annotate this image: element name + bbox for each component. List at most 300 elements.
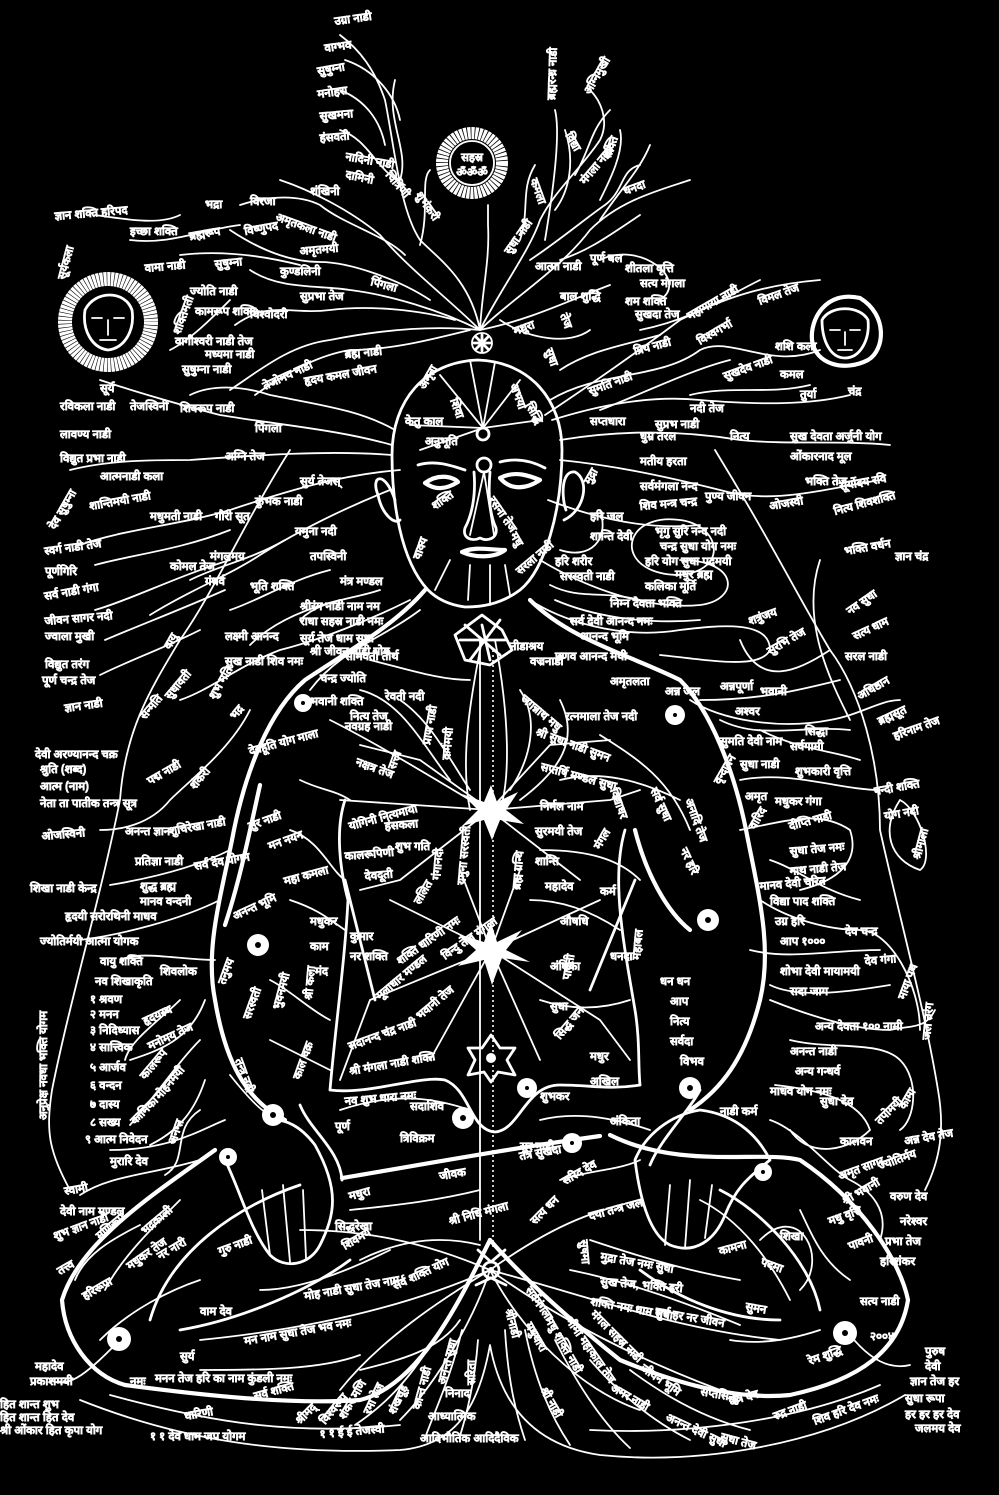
- labels: right side column: सुधा देव: [819, 1094, 854, 1109]
- labels: torso and arms: नव शुभ धारा नमः: [343, 1090, 417, 1109]
- labels: left side column: अग्नि तेज: [225, 449, 265, 463]
- body outline: seated figure: [49, 450, 941, 1458]
- labels: left side column: अनुप्रेक्ष नवधा भक्ति योगम: [36, 1010, 51, 1120]
- labels: right side column: दीप्ति नाडी: [786, 808, 834, 833]
- labels: right side column: देव चन्द्र: [844, 924, 879, 938]
- labels: right side column: सरस्वती नाडी: [559, 569, 616, 583]
- labels: left side column: हरिरूपा: [79, 1274, 115, 1303]
- labels: legs and lower radial fan: विश्वरूप: [316, 1390, 351, 1428]
- labels: right side column: ज्ञान तेज हर: [909, 1374, 960, 1388]
- labels: right side column: चन्द्र सुधा योग नमः: [659, 539, 737, 554]
- labels: right side column: सूर्योदय रवि: [837, 471, 888, 494]
- labels: legs and lower radial fan: सर्व शक्ति: [251, 1379, 296, 1403]
- labels: legs and lower radial fan: १ १ देव धाम जप योगम: [150, 1429, 247, 1443]
- labels: torso and arms: ललित: [410, 877, 435, 907]
- labels: upper tree of channels: शुभंकरी: [412, 189, 443, 225]
- labels: upper tree of channels: इच्छा शक्ति: [129, 224, 178, 238]
- labels: upper tree of channels: विश्वोदरी: [249, 307, 288, 321]
- labels: upper tree of channels: शक्तिमती: [170, 293, 197, 336]
- labels: torso and arms: सरला नाडी: [512, 537, 557, 578]
- labels: right side column: ब्रह्मसूत: [875, 704, 909, 729]
- labels: upper tree of channels: मंगला नाडी: [576, 142, 617, 188]
- labels: left side column: नव शिखाकृति: [94, 974, 153, 989]
- labels: upper tree of channels: उग्रा नाडी: [332, 9, 374, 28]
- labels: legs and lower radial fan: मंगल सहस्र नाडी: [587, 1307, 646, 1366]
- labels: right side column: वरुण देव: [889, 1189, 928, 1203]
- labels: legs and lower radial fan: सत्य धन: [528, 1194, 562, 1228]
- labels: torso and arms: अभया: [507, 382, 528, 412]
- labels: left side column: शिवलोक: [159, 964, 198, 978]
- labels: right side column: मानव देवी चरित: [758, 873, 826, 893]
- labels: legs and lower radial fan: मनन तेज हरि का नाम कुंडली नमः: [154, 1371, 293, 1386]
- labels: upper tree of channels: वागीश्वरी नाडी तेज: [174, 334, 253, 348]
- labels: upper tree of channels: वामा नाडी: [143, 257, 187, 275]
- labels: legs and lower radial fan: शंकर मणि: [335, 1377, 369, 1422]
- labels: torso and arms: सर्व देव योगम: [192, 849, 252, 873]
- labels: legs and lower radial fan: कर्म: [599, 884, 617, 898]
- labels: right side column: मधुकर गंगा: [774, 795, 823, 809]
- labels: torso and arms: सिद्धि: [522, 399, 546, 427]
- labels: legs and lower radial fan: छत्र देव: [726, 1386, 760, 1408]
- labels: right side column: शोभा देवी मायामयी: [780, 964, 861, 978]
- labels: right side column: कामा: [897, 1086, 919, 1112]
- labels: upper tree of channels: चित्रिणी: [382, 167, 414, 201]
- labels: right side column: धुम्र तरल: [640, 431, 677, 444]
- labels: upper tree of channels: अग्निमुखी: [580, 53, 614, 97]
- labels: legs and lower radial fan: औषधि: [560, 914, 589, 928]
- labels: right side column: हरि योग सुधा पदमयी: [644, 554, 733, 569]
- labels: left side column: अनन्त: [167, 1118, 187, 1146]
- labels: right side column: शुभकारी वृत्ति: [795, 764, 852, 779]
- labels: right side column: कालवन: [839, 1136, 873, 1148]
- labels: legs and lower radial fan: सप्तसिन्धु: [698, 1384, 741, 1406]
- labels: left side column: ७ दास्य: [90, 1099, 121, 1111]
- labels: legs and lower radial fan: मन नाम सुधा तेज भव नमः: [242, 1315, 353, 1349]
- labels: right side column: मधु वृत्ति: [825, 1203, 865, 1229]
- labels: torso and arms: शिवा: [447, 395, 468, 421]
- labels: left side column: ४ सात्त्विक: [90, 1040, 134, 1054]
- labels: right side column: अनन्त नाडी: [790, 1044, 838, 1058]
- labels: torso and arms: शक्ति धारिणी नमः: [394, 913, 463, 967]
- labels: upper tree of channels: सुखदा तेज: [634, 307, 680, 322]
- labels: upper tree of channels: हृदय कमल जीवन: [302, 361, 378, 388]
- labels: right side column: ज्ञान चंद्र: [894, 550, 929, 563]
- labels: left side column: २ मनन: [90, 1009, 119, 1021]
- labels: left side column: मोहनमयी: [151, 1062, 188, 1103]
- labels: upper tree of channels: कमला: [527, 176, 548, 207]
- labels: torso and arms: कुमार: [349, 931, 375, 944]
- labels: torso and arms: मानव वन्दनी: [139, 894, 192, 908]
- labels: legs and lower radial fan: अनन्त सुधा: [436, 1337, 461, 1386]
- labels: right side column: सुधा नाडी: [739, 757, 781, 772]
- labels: upper tree of channels: पिंगला: [368, 274, 400, 295]
- labels: torso and arms: कुंभक नाडी: [254, 494, 303, 509]
- labels: legs and lower radial fan: सुधा तेज: [718, 1429, 758, 1453]
- labels: torso and arms: देवदूती: [363, 867, 394, 884]
- labels: legs and lower radial fan: शंखचूड़: [386, 1382, 412, 1417]
- labels: right side column: आप १०००: [780, 936, 825, 948]
- labels: torso and arms: केतु काल: [404, 414, 444, 429]
- labels: left side column: ६ वन्दन: [90, 1080, 122, 1092]
- labels: right side column: मधुर ब्रह्म: [674, 569, 713, 582]
- labels: upper tree of channels: धनदा: [622, 178, 648, 198]
- labels: right side column: अन्न देव तेज: [903, 1126, 955, 1148]
- labels: legs and lower radial fan: धारिणी: [183, 1404, 215, 1423]
- labels: upper tree of channels: तुर्या: [799, 387, 817, 402]
- labels: right side column: जल तरंग: [920, 1001, 936, 1041]
- labels: left side column: कामिका: [127, 1093, 162, 1128]
- labels: right side column: वारिद: [745, 804, 770, 832]
- labels: upper tree of channels: सुषुम्ना: [315, 61, 347, 79]
- labels: legs and lower radial fan: अनादि तेज: [682, 796, 711, 844]
- labels: upper tree of channels: आत्मा नाडी: [535, 259, 583, 273]
- labels: torso and arms: देवहूति योग माला: [246, 726, 321, 760]
- labels: legs and lower radial fan: शक्ति नमः धाम सुधा: [589, 1294, 675, 1324]
- labels: right side column: माधव योग नमः: [769, 1084, 832, 1098]
- labels: legs and lower radial fan: शिखा: [779, 1229, 804, 1243]
- labels: torso and arms: हंसकला: [383, 817, 420, 833]
- labels: right side column: देवी: [924, 1359, 942, 1373]
- labels: torso and arms: त्रिविक्रम: [399, 1131, 436, 1145]
- ear left: [376, 479, 400, 521]
- labels: right side column: सरल नाडी: [844, 649, 888, 663]
- labels: upper tree of channels: कुण्डलिनी: [279, 264, 322, 279]
- labels: legs and lower radial fan: मधुरा: [347, 1185, 373, 1204]
- labels: right side column: मुद्रा: [582, 466, 602, 488]
- labels: torso and arms: तपस्विनी: [309, 549, 347, 563]
- labels: torso and arms: वायु: [162, 630, 182, 653]
- labels: left side column: ८ सख्य: [90, 1117, 122, 1129]
- labels: legs and lower radial fan: सर्वदा: [669, 1034, 694, 1048]
- circle: top lotus: सहस्र: [460, 152, 484, 164]
- labels: torso and arms: प्रतिज्ञा नाडी: [134, 854, 184, 868]
- labels: legs and lower radial fan: दया तन्त्र जल: [587, 1197, 645, 1223]
- labels: left side column: तत्त्व: [55, 1258, 77, 1278]
- labels: torso and arms: रसना तेज: [485, 493, 520, 535]
- labels: right side column: २००४: [870, 1331, 894, 1343]
- labels: left side column: ज्योतिर्मयी आत्मा योगक: [39, 934, 140, 948]
- labels: right side column: मतीय हरता: [639, 454, 688, 468]
- labels: legs and lower radial fan: सुख तेज, भक्ति हरी: [599, 1274, 684, 1296]
- labels: legs and lower radial fan: श्रीनाडी: [502, 1306, 524, 1340]
- labels: upper tree of channels: सुमति नाडी: [585, 369, 635, 399]
- labels: legs and lower radial fan: धनदा: [610, 951, 634, 963]
- labels: upper tree of channels: अमृतकला नाडी: [274, 210, 339, 246]
- labels: legs and lower radial fan: अखिल: [590, 1074, 620, 1088]
- labels: torso and arms: अनन्त भूमि: [230, 890, 280, 924]
- labels: legs and lower radial fan: अंबिका: [550, 959, 581, 973]
- labels: torso and arms: शुभ मति: [205, 663, 236, 702]
- labels: left side column: हृदयी सरोरथिनी माधव: [64, 909, 157, 923]
- labels: legs and lower radial fan: सर्व हर नर जीवन: [653, 1304, 726, 1330]
- labels: legs and lower radial fan: सिद्ध जन: [551, 1003, 587, 1043]
- labels: legs and lower radial fan: महादेव: [544, 879, 574, 893]
- labels: right side column: अमृतलता: [610, 676, 651, 689]
- labels: upper tree of channels: विमल तेज: [755, 280, 801, 308]
- labels: torso and arms: सदाशिव: [409, 1099, 445, 1113]
- labels: legs and lower radial fan: महाबल: [631, 928, 646, 961]
- labels: legs and lower radial fan: रुद्र नाडी: [770, 1397, 810, 1423]
- labels: torso and arms: मंद: [314, 965, 329, 978]
- labels: torso and arms: श्री जीवन नाडी योग: [309, 644, 390, 658]
- labels: upper tree of channels: तेज: [557, 310, 576, 331]
- labels: upper tree of channels: विष्णुपद: [242, 218, 280, 239]
- labels: right side column: अश्वर: [735, 706, 761, 718]
- labels: left side column: ज्वाला मुखी: [44, 629, 95, 644]
- labels: legs and lower radial fan: शिवमय: [339, 1224, 374, 1253]
- labels: upper tree of channels: सुप्रभा तेज: [299, 289, 344, 304]
- labels: legs and lower radial fan: धन धन: [660, 976, 691, 988]
- labels: legs and lower radial fan: गुरु नाडी: [215, 1232, 255, 1259]
- labels: legs and lower radial fan: रमा तेज: [360, 1380, 387, 1417]
- labels: torso and arms: श्री मंगला नाडी शक्ति: [347, 1049, 436, 1078]
- labels: upper tree of channels: [53, 9, 817, 402]
- labels: legs and lower radial fan: श्री सुधा नाडी सुमन: [533, 724, 613, 766]
- labels: right side column: पावनी: [845, 1231, 876, 1253]
- labels: left side column: श्रुति (शब्द): [39, 762, 86, 777]
- labels: right side column: सत्य धाम: [850, 615, 892, 643]
- labels: legs and lower radial fan: कान्त नाडी: [409, 1364, 434, 1412]
- labels: right side column: हरि जल: [589, 509, 625, 523]
- labels: right side column: पुण्य जीवन: [704, 489, 752, 504]
- labels: legs and lower radial fan: मधु शक्ति नाडी: [541, 1314, 586, 1377]
- labels: right side column: नित्य: [729, 429, 751, 443]
- labels: torso and arms: गंधर्व: [204, 574, 226, 588]
- labels: torso and arms: [125, 363, 557, 1145]
- chakras along the spine: [107, 333, 857, 1351]
- labels: left side column: शिवरूप नाडी: [179, 401, 235, 415]
- labels: legs and lower radial fan: मणिरूप: [92, 1210, 128, 1243]
- labels: left side column: आत्मनाडी कला: [100, 469, 164, 483]
- labels: left side column: महादेव: [34, 1359, 64, 1373]
- eyes: [425, 474, 540, 488]
- labels: left side column: कालरूप: [137, 1047, 170, 1083]
- labels: right side column: शत्रुंजय: [747, 605, 780, 629]
- labels: legs and lower radial fan: पदमा: [758, 1256, 785, 1276]
- labels: left side column: मनोमय तेज: [144, 1020, 195, 1053]
- labels: legs and lower radial fan: जीवन भूमि: [637, 1360, 684, 1400]
- labels: torso and arms: भवानी शक्ति: [310, 694, 364, 708]
- labels: left side column: [0, 243, 283, 1438]
- labels: torso and arms: कर्ममयी: [439, 726, 456, 761]
- labels: right side column: ज्योतिर्मय: [875, 1146, 919, 1173]
- labels: left side column: विद्युत तरंग: [44, 657, 90, 672]
- labels: legs and lower radial fan: सरिता: [464, 1359, 478, 1386]
- head and face: [376, 360, 584, 607]
- labels: legs and lower radial fan: रत्नमाला तेज नदी: [564, 709, 638, 723]
- labels: torso and arms: मंत्र मण्डल: [339, 575, 384, 588]
- labels: torso and arms: सोमवती तीर्थ: [344, 649, 400, 663]
- labels: legs and lower radial fan: शुभकर: [540, 1091, 571, 1104]
- labels: left side column: ९ आत्म निवेदन: [85, 1132, 148, 1146]
- labels: legs and lower radial fan: अनन्त देवी सुधा: [663, 1410, 729, 1452]
- labels: torso and arms: चन्द्र ज्योति: [319, 671, 366, 685]
- labels: torso and arms: रेवती नदी: [384, 689, 425, 703]
- labels: legs and lower radial fan: सुर्य: [179, 1349, 196, 1364]
- labels: upper tree of channels: मधुरा: [511, 319, 538, 339]
- labels: right side column: श्री भवानी: [839, 1174, 883, 1208]
- labels: left side column: १ श्रवण: [90, 994, 123, 1006]
- labels: legs and lower radial fan: सुधा: [549, 1001, 569, 1014]
- labels: right side column: हर हर हर देव: [904, 1407, 960, 1421]
- labels: right side column: श्रीमाला: [909, 825, 931, 862]
- labels: right side column: भृगु सुरि नन्द नदी: [655, 524, 727, 539]
- labels: right side column: ओंकारनाद मूल: [790, 449, 853, 464]
- labels: legs and lower radial fan: नर हरि: [677, 844, 702, 878]
- labels: right side column: सत्य नाडी: [859, 1294, 900, 1308]
- labels: right side column: नरेश्वर: [899, 1214, 928, 1228]
- labels: upper tree of channels: अमृतमयी: [299, 241, 340, 259]
- labels: left side column: स्वर्ग नाडी तेज: [42, 536, 103, 558]
- labels: torso and arms: मंगलमय: [209, 550, 246, 563]
- labels: upper tree of channels: नादिनी नाडी: [343, 149, 397, 172]
- labels: legs and lower radial fan: पार्वती: [559, 952, 578, 982]
- labels: upper tree of channels: प्रिय नाडी: [631, 334, 673, 358]
- labels: right side column: नदी तेज: [689, 401, 724, 415]
- labels: torso and arms: अनुभूति: [425, 434, 458, 449]
- mouth: [462, 549, 505, 556]
- labels: torso and arms: मूलाधार मण्डल: [373, 953, 431, 1004]
- labels: torso and arms: भद्र: [228, 703, 247, 722]
- labels: legs and lower radial fan: नमः: [129, 1376, 146, 1388]
- labels: torso and arms: अमृता: [417, 363, 442, 392]
- labels: right side column: नित्य शिवशक्ति: [831, 488, 897, 518]
- labels: legs and lower radial fan: निर्मल नाम: [539, 799, 585, 813]
- labels: right side column: सुमति देवी नाम: [719, 734, 783, 749]
- labels: torso and arms: गौरी सूत: [214, 509, 250, 524]
- labels: upper tree of channels: कमल: [779, 369, 805, 381]
- labels: legs and lower radial fan: जगन्नाथ मधु: [517, 692, 564, 735]
- labels: right side column: योग नदी: [882, 803, 921, 823]
- labels: right side column: वज्रनाडी: [529, 654, 564, 668]
- labels: left side column: देव सुषुम्ना: [45, 486, 81, 533]
- labels: upper tree of channels: सुधा: [541, 346, 560, 369]
- labels: right side column: तपोमयी: [872, 1093, 906, 1128]
- labels: torso and arms: अनन्त ज्ञान: [125, 826, 171, 838]
- labels: torso and arms: पद्म नाडी: [144, 757, 184, 788]
- labels: left side column: ३ निदिध्यास: [90, 1023, 141, 1037]
- labels: torso and arms: सुधावती: [161, 666, 195, 703]
- labels: left side column: रविकला नाडी: [59, 399, 116, 413]
- labels: legs and lower radial fan: वाम देव: [199, 1304, 233, 1318]
- nose: [464, 472, 496, 540]
- labels: legs and lower radial fan: अंकिता: [610, 1114, 641, 1128]
- labels: legs and lower radial fan: आदिभौतिक आदिदैविक: [420, 1431, 520, 1445]
- labels: right side column: सदा जाग: [789, 986, 829, 998]
- labels: right side column: अमृत सागर: [837, 1155, 887, 1184]
- labels: upper tree of channels: सत्य मंगला: [639, 277, 686, 290]
- labels: torso and arms: शुद्ध ब्रह्म: [140, 881, 177, 894]
- labels: upper tree of channels: सुषुम्ना: [213, 256, 244, 272]
- labels: upper tree of channels: सुषुम्ना नाडी: [181, 362, 232, 377]
- labels: torso and arms: नक्षत्र तेज: [353, 754, 396, 781]
- labels: left side column: मुरारि देव: [109, 1154, 149, 1169]
- labels: torso and arms: सुर्य तेजस्: [299, 474, 343, 489]
- labels: right side column: सप्तधारा: [589, 416, 627, 428]
- labels: torso and arms: सुर नाडी: [245, 808, 284, 834]
- labels: right side column: वृन्दावन: [712, 752, 740, 788]
- circle: sun face: [65, 279, 151, 396]
- labels: right side column: शिव मन्त्र चन्द्र: [638, 494, 698, 513]
- labels: upper tree of channels: ब्रह्म नाडी: [343, 344, 384, 361]
- labels: torso and arms: भवानी तेज: [413, 982, 457, 1022]
- labels: right side column: नव सुधा: [844, 588, 881, 619]
- labels: right side column: पुरुष: [924, 1346, 946, 1359]
- labels: right side column: सुधा रूपा: [904, 1393, 945, 1406]
- labels: right side column: सर्वगामी: [789, 739, 824, 753]
- labels: legs and lower radial fan: १ १ ई ई तेजस्वी: [319, 1421, 386, 1441]
- labels: torso and arms: पूर्ण: [334, 1119, 351, 1134]
- labels: right side column: सुरभि तेज: [764, 624, 809, 659]
- labels: torso and arms: भूति शक्ति: [250, 579, 295, 594]
- labels: left side column: देवी अरण्यानन्द चक्र: [34, 747, 119, 761]
- labels: legs and lower radial fan: सरिद देव: [559, 1157, 599, 1188]
- labels: left side column: पिंगला: [254, 421, 283, 435]
- labels: legs and lower radial fan: शान्ति: [535, 854, 559, 868]
- labels: left side column: आत्म (नाम): [40, 781, 89, 793]
- labels: upper tree of channels: पूर्ण बल: [589, 251, 624, 266]
- labels: legs and lower radial fan: श्री नाडी: [537, 1384, 566, 1421]
- circle: top lotus: [442, 133, 502, 193]
- labels: right side column: ओजस्वी: [768, 493, 805, 513]
- labels: legs and lower radial fan: श्री निधि मंगला: [446, 1198, 511, 1228]
- labels: left side column: नेता ता पातीक तन्त्र सूत्र: [39, 796, 138, 811]
- labels: upper tree of channels: विद्या: [562, 129, 585, 154]
- labels: upper tree of channels: विरजा: [249, 194, 277, 208]
- labels: legs and lower radial fan: भीमा महाकाल तेज: [563, 1314, 619, 1386]
- labels: right side column: हरिनाम तेज: [890, 713, 942, 743]
- labels: left side column: श्री ओंकार हित कृपा योग: [0, 1423, 103, 1438]
- labels: upper tree of channels: तेजोमय नाडी: [259, 357, 315, 393]
- labels: torso and arms: लक्ष्मी आनन्द: [224, 629, 280, 643]
- labels: legs and lower radial fan: नित्य: [669, 1014, 691, 1028]
- labels: torso and arms: शक्ति: [429, 487, 456, 512]
- labels: right side column: नाथ नाडी तेज: [788, 859, 847, 878]
- labels: left side column: ओजस्विनी: [41, 825, 87, 843]
- labels: upper tree of channels: शम शक्ति: [625, 294, 667, 308]
- labels: legs and lower radial fan: कामना: [717, 1239, 749, 1258]
- labels: right side column: सुप्रभ नाडी: [654, 417, 700, 432]
- labels: torso and arms: मधु: [506, 530, 525, 550]
- labels: torso and arms: ब्रह्म ग्रन्थि: [509, 850, 526, 891]
- labels: left side column: विद्युत प्रभा नाडी: [59, 451, 127, 466]
- labels: torso and arms: काल चक्र: [291, 1039, 317, 1082]
- labels: right side column: भक्ति तेज: [805, 474, 848, 488]
- labels: upper tree of channels: महामाया नाडी: [684, 281, 742, 323]
- labels: legs and lower radial fan: सुरमयी तेज: [534, 824, 583, 839]
- labels: right side column: रेम शुद्धि: [805, 1342, 845, 1369]
- circle: moon face: चंद्र: [847, 385, 862, 398]
- labels: torso and arms: सदानन्द चंद्र नाडी: [345, 1015, 419, 1053]
- labels: left side column: शिखा नाडी केन्द्र: [29, 881, 97, 895]
- labels: torso and arms: भुवनमयी: [269, 970, 294, 1011]
- labels: left side column: लावण्य नाडी: [59, 427, 112, 441]
- circle: sun face: सूर्य: [99, 381, 116, 396]
- labels: right side column: निम्न देवता भक्ति: [609, 596, 682, 610]
- labels: left side column: देवी नाम मण्डल: [59, 1204, 126, 1218]
- labels: torso and arms: कालरूपिणी: [343, 845, 395, 863]
- labels: left side column: प्रकाशमयी: [29, 1374, 74, 1388]
- labels: upper tree of channels: बाल शुद्धि: [559, 289, 601, 304]
- labels: torso and arms: श्री कला: [301, 964, 318, 1001]
- labels: right side column: प्रणव आनन्द मयी: [554, 649, 628, 663]
- circle: moon face: [812, 297, 881, 398]
- labels: right side column: प्रभा तेज: [884, 1234, 921, 1248]
- labels: right side column: अधिष्ठान: [854, 673, 892, 703]
- labels: legs and lower radial fan: निनाद: [444, 1386, 471, 1400]
- labels: legs and lower radial fan: सर्वमंगला: [522, 1283, 557, 1324]
- labels: right side column: सर्वमंगला नन्द: [639, 479, 698, 493]
